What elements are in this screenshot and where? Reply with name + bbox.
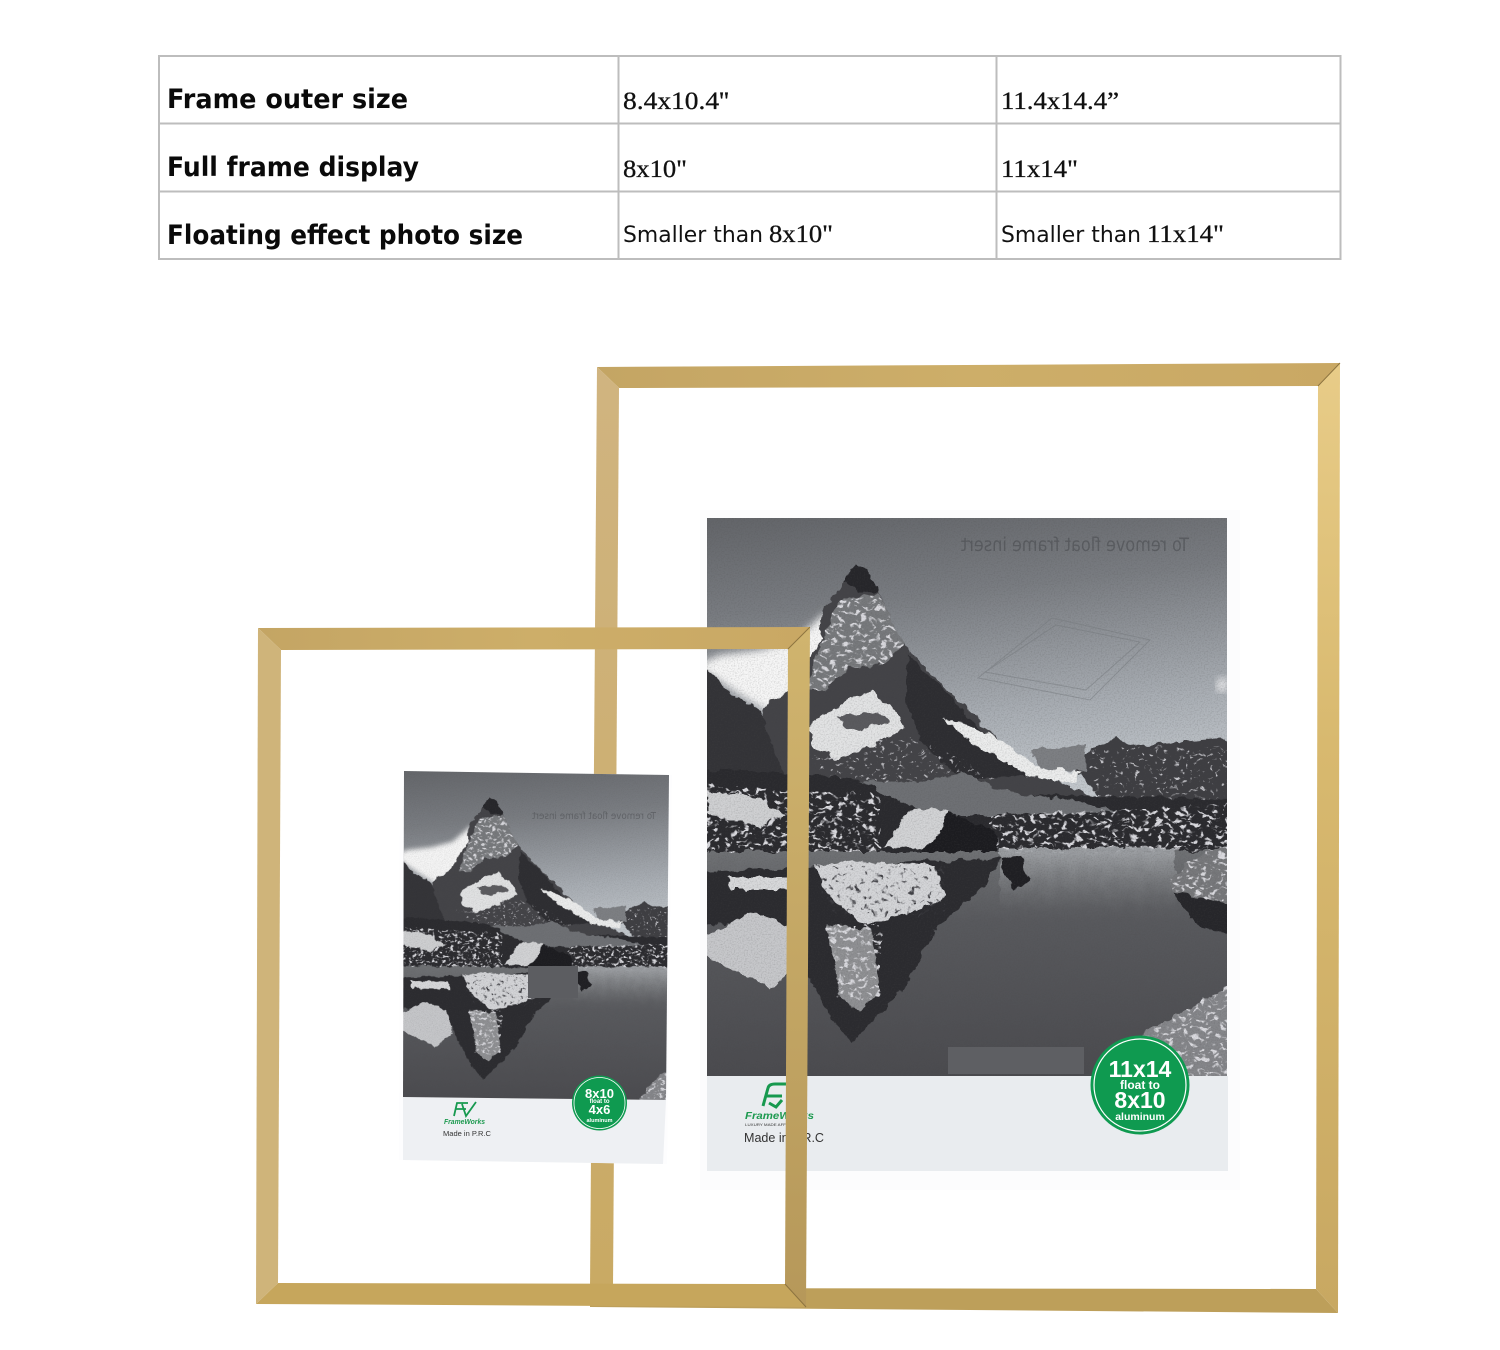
badge: 8x10 float to 4x6: 8x10 bbox=[585, 1086, 614, 1101]
large photo insert bbox=[707, 518, 1228, 1171]
value: 11x14 floating size: Smaller than bbox=[1001, 223, 1141, 248]
value: 11x14 outer size: 11.4x14.4” bbox=[1001, 88, 1119, 115]
faint frame diagram bbox=[978, 618, 1150, 700]
badge: 11x14 float to 8x10 bbox=[1090, 1036, 1190, 1134]
value: 8x10 outer size: 8.4x10.4'' bbox=[623, 88, 729, 115]
logo: FrameWorks large: LUXURY MADE AFFORDABLE bbox=[745, 1123, 808, 1127]
logo: FrameWorks large: Made in P.R.C bbox=[744, 1131, 824, 1145]
small gold frame 8x10 bbox=[256, 627, 810, 1307]
value: 8x10 floating size: Smaller than bbox=[623, 223, 763, 248]
mirrored show-through text small: To remove float frame insert bbox=[532, 811, 657, 822]
mirrored show-through text: To remove float frame insert bbox=[961, 535, 1190, 556]
logo: FrameWorks large: FrameWorks bbox=[745, 1110, 814, 1122]
badge: 8x10 float to 4x6: 4x6 bbox=[589, 1102, 610, 1117]
badge: 11x14 float to 8x10: float to bbox=[1120, 1078, 1160, 1092]
badge: 8x10 float to 4x6: float to bbox=[590, 1099, 610, 1105]
row heading: frame outer size: Frame outer size bbox=[167, 84, 408, 115]
badge: 11x14 float to 8x10: 11x14 bbox=[1109, 1056, 1172, 1082]
badge: 11x14 float to 8x10: aluminum bbox=[1115, 1111, 1165, 1123]
badge: 11x14 float to 8x10: 8x10 bbox=[1114, 1087, 1166, 1113]
value: 8x10 floating size bbox=[623, 221, 833, 248]
row heading: floating effect photo size: Floating effect photo size bbox=[167, 220, 523, 251]
large gold frame 11x14 bbox=[590, 363, 1340, 1313]
size comparison table bbox=[159, 56, 1340, 259]
row heading: full frame display: Full frame display bbox=[167, 152, 419, 183]
value: 8x10 display: 8x10" bbox=[623, 156, 687, 183]
value: 11x14 display: 11x14" bbox=[1001, 156, 1078, 183]
logo: FrameWorks small bbox=[443, 1102, 492, 1138]
badge: 8x10 float to 4x6 bbox=[572, 1076, 627, 1130]
logo: FrameWorks small: Made in P.R.C bbox=[443, 1129, 492, 1138]
logo: FrameWorks large bbox=[744, 1084, 824, 1145]
value: 11x14 floating size: 11x14" bbox=[1147, 221, 1224, 248]
show-through rectangle bbox=[948, 1047, 1084, 1074]
value: 8x10 floating size: 8x10" bbox=[769, 221, 833, 248]
small photo insert bbox=[403, 771, 669, 1164]
logo: FrameWorks small: FrameWorks bbox=[444, 1119, 485, 1126]
badge: 8x10 float to 4x6: aluminum bbox=[587, 1118, 613, 1124]
value: 11x14 floating size bbox=[1001, 221, 1224, 248]
